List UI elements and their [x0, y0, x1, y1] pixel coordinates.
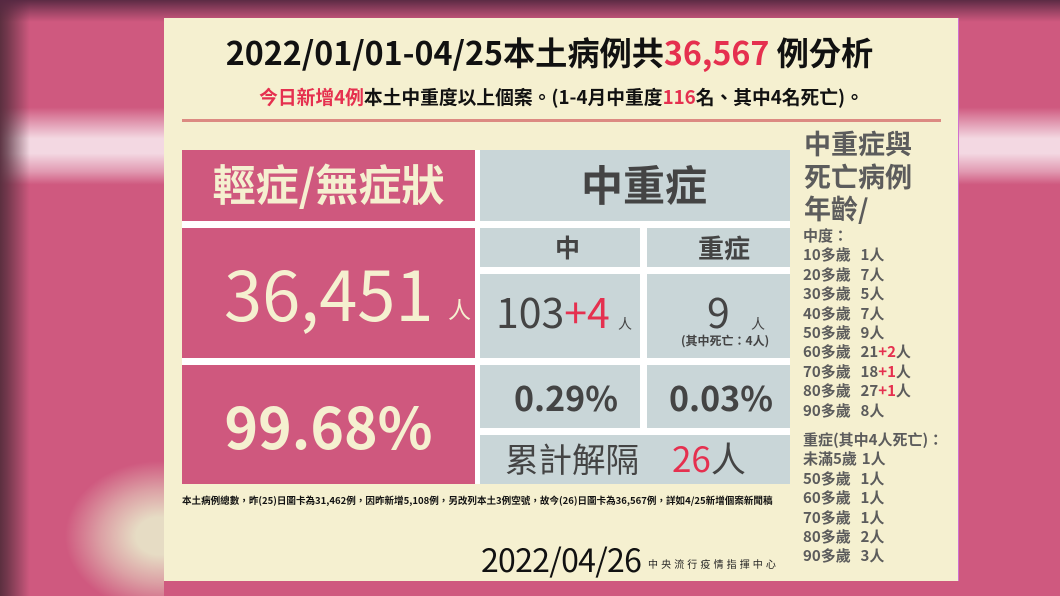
footnote: 本土病例總數，昨(25)日圖卡為31,462例，因昨新增5,108例，另改列本土3例空號，故今(26)日圖卡為36,567例，詳如4/25新增個案新聞稿	[182, 493, 773, 507]
moderate age list: 20多歲 7人	[803, 264, 884, 285]
severe percent	[647, 365, 790, 428]
moderate percent	[480, 365, 640, 428]
sidebar heading: 年齡/	[804, 188, 868, 227]
severe count: 人	[751, 314, 765, 334]
sidebar heading	[804, 123, 912, 227]
severe age list	[803, 429, 943, 566]
moderate age list: 90多歲 8人	[803, 400, 884, 421]
severe count: (其中死亡：4人)	[681, 332, 769, 349]
title: 2022/01/01-04/25本土病例共36,567 例分析	[226, 29, 873, 75]
date: 2022/04/26	[481, 536, 641, 582]
severe age list: 重症(其中4人死亡)：	[803, 429, 943, 450]
moderate percent: 0.29%	[514, 372, 618, 421]
moderate count: 103+4	[496, 280, 610, 340]
severe percent: 0.03%	[669, 372, 773, 421]
mild count: 人	[448, 291, 471, 325]
header: mild	[182, 150, 475, 221]
severe age list: 60多歲 1人	[803, 487, 884, 508]
source: 中央流行疫情指揮中心	[648, 556, 779, 571]
moderate age list	[803, 225, 911, 421]
sidebar heading: 中重症與	[804, 123, 912, 162]
moderate age list: 60多歲 21+2人	[803, 341, 911, 362]
severe age list: 80多歲 2人	[803, 526, 884, 547]
moderate count	[480, 274, 640, 358]
released from isolation	[480, 435, 790, 484]
table panel	[182, 150, 790, 484]
severe count	[647, 274, 790, 358]
column: moderate: 中	[555, 229, 580, 265]
mild count: 36,451	[224, 241, 433, 341]
moderate age list: 40多歲 7人	[803, 303, 884, 324]
severe age list: 50多歲 1人	[803, 468, 884, 489]
header: moderate and severe: 中重症	[581, 153, 707, 214]
released from isolation: 26人	[672, 432, 746, 483]
moderate age list: 50多歲 9人	[803, 322, 884, 343]
header: mild: 輕症/無症狀	[213, 152, 444, 214]
mild count	[182, 228, 475, 358]
divider	[182, 119, 941, 122]
severe age list: 90多歲 3人	[803, 545, 884, 566]
moderate age list: 中度：	[803, 225, 848, 246]
column: severe: 重症	[698, 229, 750, 266]
severe count: 9	[707, 280, 730, 340]
moderate age list: 80多歲 27+1人	[803, 380, 911, 401]
moderate age list: 70多歲 18+1人	[803, 361, 911, 382]
header: moderate and severe	[480, 150, 790, 221]
severe age list: 70多歲 1人	[803, 507, 884, 528]
column: moderate	[480, 228, 640, 267]
released from isolation: 累計解隔	[505, 433, 639, 482]
infographic card	[164, 18, 959, 581]
sidebar heading: 死亡病例	[804, 156, 912, 194]
subtitle: 今日新增4例本土中重度以上個案。(1-4月中重度116名、其中4名死亡)。	[259, 83, 864, 110]
column: severe	[647, 228, 790, 267]
mild percent: 99.68%	[225, 384, 432, 466]
mild percent	[182, 365, 475, 484]
moderate age list: 10多歲 1人	[803, 244, 884, 265]
severe age list: 未滿5歲 1人	[803, 448, 886, 469]
moderate age list: 30多歲 5人	[803, 283, 884, 304]
moderate count: 人	[618, 314, 632, 334]
